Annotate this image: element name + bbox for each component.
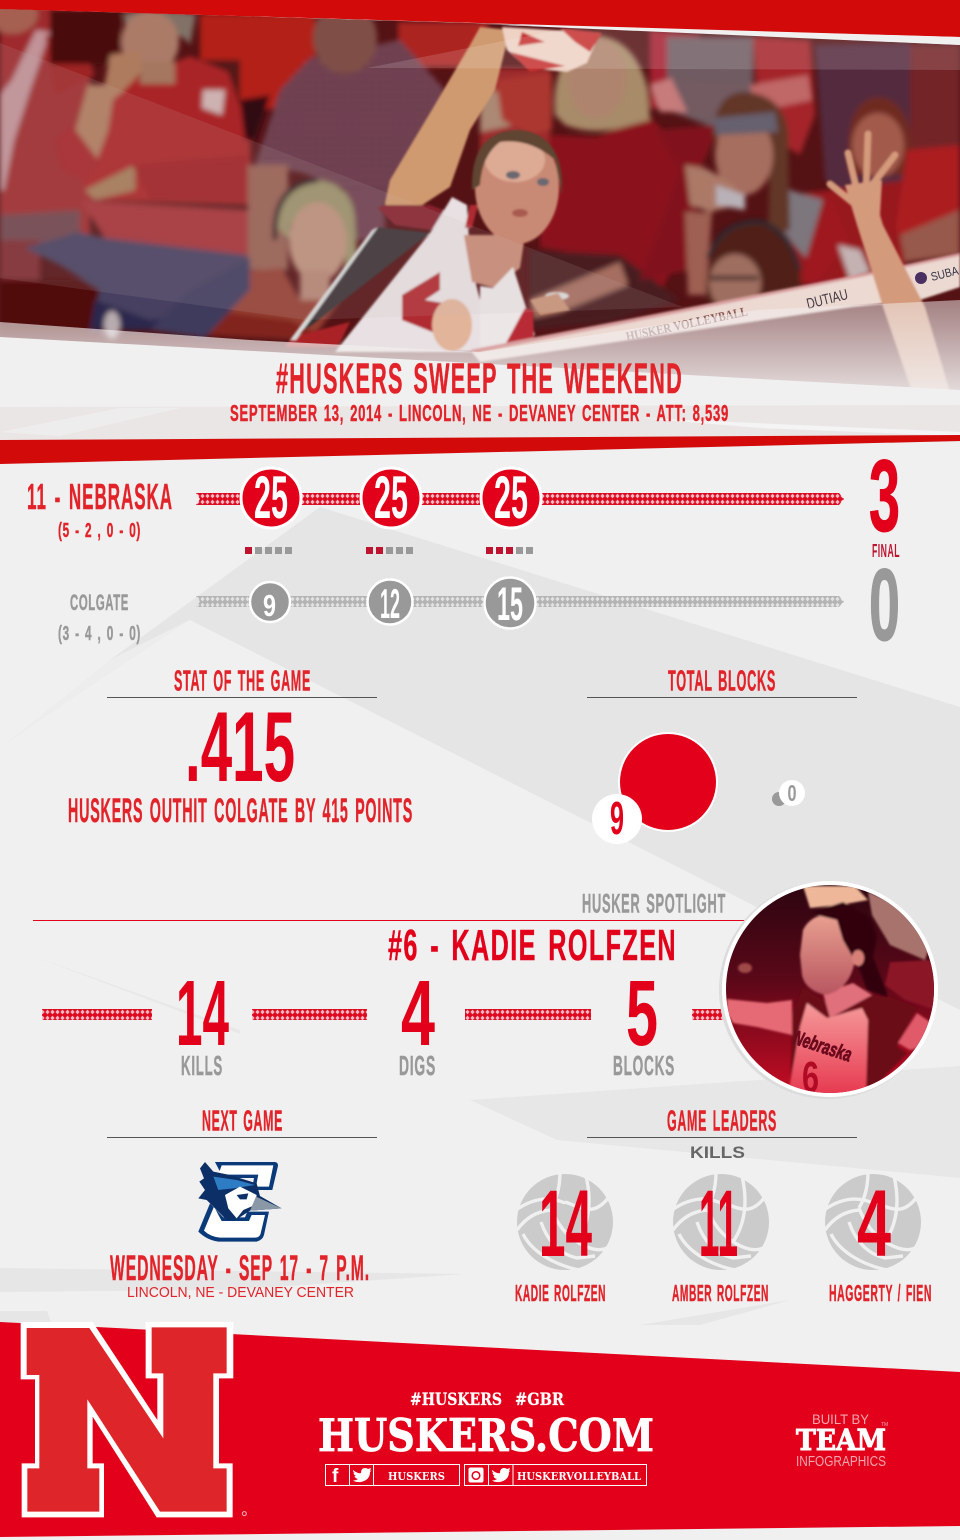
header photo of player spiking in front of crowd xyxy=(0,0,960,400)
leader: Haggerty / Fien: 4 xyxy=(857,1171,891,1277)
social: facebook and twitter handle: f xyxy=(332,1466,339,1487)
net lettering xyxy=(625,264,960,344)
leader: Haggerty / Fien xyxy=(824,1171,932,1306)
Nebraska score bar xyxy=(196,493,844,505)
scoreboard: 11 - NEBRASKA xyxy=(27,476,173,517)
stat: kills: KILLS xyxy=(181,1050,223,1081)
leader: Amber Rolfzen xyxy=(672,1171,769,1306)
Nebraska blocks bubble xyxy=(592,733,717,844)
plaid man xyxy=(240,2,488,270)
leader: Kadie Rolfzen: 14 xyxy=(539,1171,592,1277)
panel: husker spotlight: HUSKER SPOTLIGHT xyxy=(582,888,726,918)
panel: game leaders: KADIE ROLFZEN xyxy=(515,1280,606,1306)
woman with headset xyxy=(150,180,358,340)
social: instagram and twitter handle xyxy=(464,1464,646,1486)
social: facebook and twitter handle xyxy=(326,1464,460,1487)
panel: husker spotlight xyxy=(33,880,940,1102)
diagonal photo overlays xyxy=(0,18,960,400)
infographic canvas: WEDNESDAY - SEP 17 - 7 P.M. xyxy=(110,1249,370,1288)
player portrait: 6 xyxy=(802,1053,819,1102)
player xyxy=(285,27,602,352)
panel: game leaders: GAME LEADERS xyxy=(667,1106,777,1138)
icon: Creighton bluejay logo xyxy=(198,1162,282,1242)
leader: Kadie Rolfzen xyxy=(515,1171,613,1306)
Colgate set scores xyxy=(250,577,536,630)
player portrait xyxy=(719,880,940,1102)
team: Colgate: COLGATE xyxy=(70,590,129,615)
red divider stripe xyxy=(0,435,960,464)
built by team infographics credit xyxy=(796,1412,888,1470)
panel: game leaders: AMBER ROLFZEN xyxy=(672,1280,769,1306)
title band xyxy=(0,337,960,442)
net band xyxy=(470,253,960,362)
crowd shading xyxy=(0,9,960,340)
crowd left xyxy=(0,0,315,340)
Nebraska set scores: 25 xyxy=(254,464,288,531)
player name: #6 - KADIE ROLFZEN xyxy=(388,921,677,970)
player portrait: Nebraska xyxy=(791,1027,854,1067)
Colgate set scores: 12 xyxy=(380,580,400,627)
built by team infographics credit: BUILT BY xyxy=(812,1412,869,1427)
Colgate blocks bubble: 0 xyxy=(788,780,796,806)
Colgate score bar xyxy=(196,596,844,607)
scoreboard xyxy=(27,439,900,662)
big stat: .415 xyxy=(185,691,295,802)
stat: blocks: 5 xyxy=(626,961,658,1065)
net lettering: DUTIAU xyxy=(805,286,850,313)
panel: next game xyxy=(107,1106,377,1301)
crowd right xyxy=(480,30,960,330)
infographic canvas: HUSKERS OUTHIT COLGATE BY 415 POINTS xyxy=(68,792,413,830)
stat bars xyxy=(42,1009,728,1020)
panel: husker spotlight: DIGS xyxy=(399,1050,436,1081)
panel: total blocks xyxy=(587,666,857,844)
social: instagram and twitter handle: HUSKERVOLLEYBALL xyxy=(517,1470,641,1483)
kills label: KILLS xyxy=(690,1143,745,1162)
Nebraska set scores xyxy=(241,464,541,531)
hashtags: #GBR xyxy=(515,1390,565,1410)
Colgate blocks bubble xyxy=(772,780,805,806)
background facets xyxy=(0,507,960,1325)
infographic canvas: FINAL xyxy=(872,541,900,561)
panel: game leaders xyxy=(515,1106,932,1306)
panel: total blocks: TOTAL BLOCKS xyxy=(668,666,776,698)
stat: digs: 4 xyxy=(401,961,435,1065)
Nebraska set scores: 25 xyxy=(374,464,408,531)
team: Colgate: (3 - 4 , 0 - 0) xyxy=(58,623,141,645)
panel: stat of the game: STAT OF THE GAME xyxy=(174,666,311,698)
red stripe above photo xyxy=(0,0,960,45)
final sets won: 0 xyxy=(869,548,900,662)
built by team infographics credit: TEAM xyxy=(796,1423,886,1457)
net lettering: HUSKER VOLLEYBALL xyxy=(625,303,749,344)
team: Nebraska xyxy=(27,476,173,542)
footer band xyxy=(0,1322,960,1537)
Colgate set scores: 15 xyxy=(497,577,523,630)
stat: kills xyxy=(176,961,229,1081)
next game venue: LINCOLN, NE - DEVANEY CENTER xyxy=(127,1284,354,1301)
built by team infographics credit: TM xyxy=(881,1422,888,1428)
Nebraska N logo xyxy=(21,1322,246,1517)
hashtags: #HUSKERS xyxy=(410,1390,502,1410)
team: Colgate xyxy=(58,590,141,645)
Nebraska blocks bubble: 9 xyxy=(610,792,624,844)
blocker hand and arm xyxy=(830,134,950,392)
leader: Amber Rolfzen: 11 xyxy=(699,1171,738,1277)
panel: next game: NEXT GAME xyxy=(202,1106,283,1138)
final sets won xyxy=(869,439,900,662)
set progress markers xyxy=(245,547,533,554)
Nebraska set scores: 25 xyxy=(494,464,528,531)
stat: blocks xyxy=(613,961,675,1081)
panel: stat of the game xyxy=(68,666,413,830)
website: HUSKERS.COM xyxy=(318,1409,654,1462)
stat: digs xyxy=(399,961,436,1081)
Colgate set scores: 9 xyxy=(263,588,276,623)
panel: husker spotlight: BLOCKS xyxy=(613,1050,675,1081)
stat: kills: 14 xyxy=(176,961,229,1065)
built by team infographics credit: INFOGRAPHICS xyxy=(796,1453,886,1470)
final sets won: 3 xyxy=(869,439,900,553)
social: facebook and twitter handle: HUSKERS xyxy=(388,1470,445,1483)
team: Nebraska: (5 - 2 , 0 - 0) xyxy=(58,520,141,542)
